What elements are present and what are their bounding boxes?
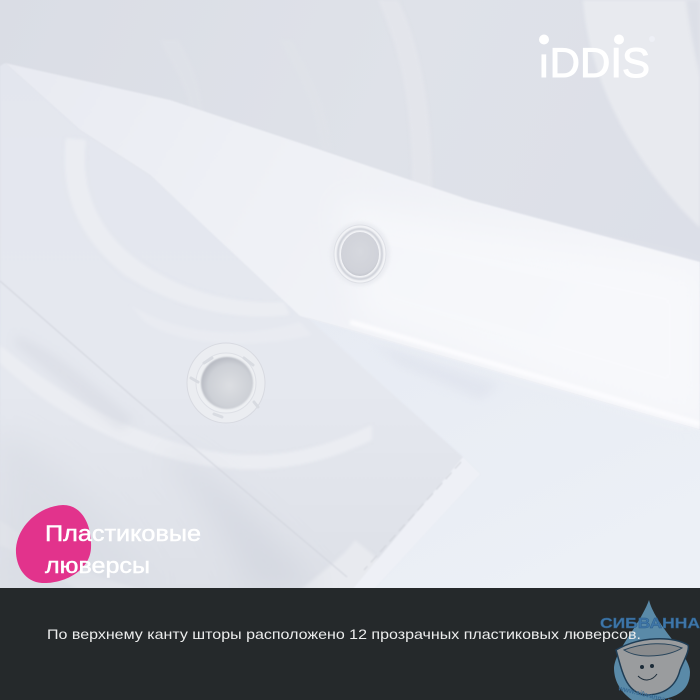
pink blob (16, 505, 91, 583)
soft shadow under upper flap (375, 345, 500, 400)
grommet: upper (330, 222, 390, 286)
heading (45, 521, 201, 578)
flap hem (352, 457, 480, 590)
dark footer band (0, 588, 700, 700)
logo: iddis: ıDDIS (538, 39, 650, 86)
water drop (614, 600, 690, 700)
watermark text (600, 615, 700, 700)
upper curtain flap (5, 63, 700, 430)
jacquard arcs on background fabric (160, 0, 700, 228)
heading: Пластиковые (45, 521, 201, 546)
lower right underlying fabric (300, 316, 700, 590)
bath (616, 639, 688, 695)
flap jacquard arcs (65, 138, 290, 317)
lower left curtain flap (0, 63, 480, 590)
watermark text: СИБВАННА (600, 615, 700, 632)
heading: люверсы (45, 553, 150, 578)
bath face (640, 665, 644, 669)
flap highlight (340, 200, 700, 420)
grommet: lower (187, 343, 265, 423)
flap fold shadows (15, 335, 135, 430)
watermark: bath in water drop (614, 600, 690, 700)
flap stitch line (0, 281, 347, 577)
fabric background (0, 0, 700, 261)
body text: По верхнему канту шторы расположено 12 прозрачных пластиковых люверсов. (47, 626, 641, 642)
hem seam (350, 322, 700, 424)
